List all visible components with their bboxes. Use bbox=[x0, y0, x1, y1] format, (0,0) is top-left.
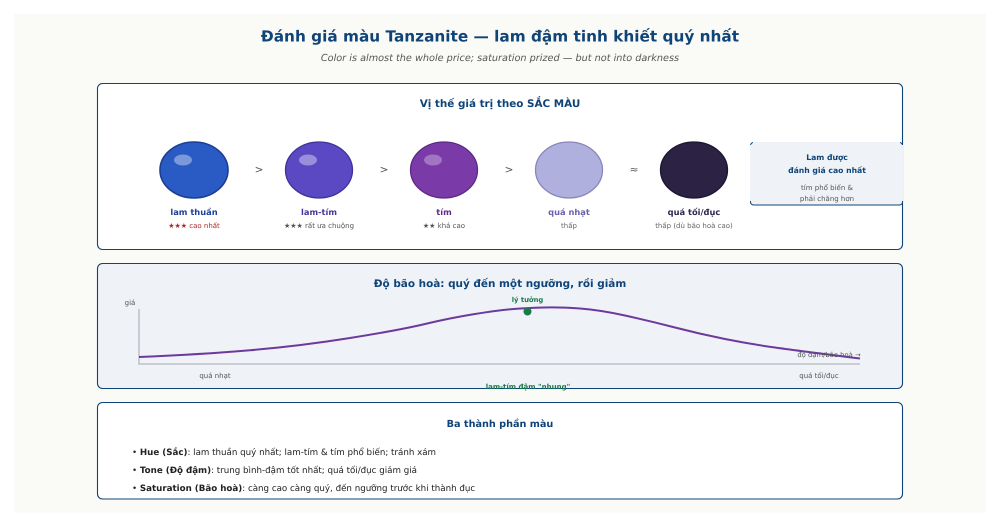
gem: too pale: quá nhạt bbox=[548, 207, 590, 217]
gem: too dark: thấp (dù bão hoà cao) bbox=[655, 222, 733, 230]
line chart: price vs saturation: độ đậm/bão hoà → bbox=[797, 351, 861, 359]
gem: violet bbox=[410, 142, 478, 230]
title: Đánh giá màu Tanzanite — lam đậm tinh khiết quý nhất bbox=[261, 28, 739, 46]
line chart: price vs saturation: giá bbox=[125, 299, 135, 307]
comparison symbol: > bbox=[505, 164, 513, 176]
line chart: price vs saturation: quá nhạt bbox=[199, 372, 231, 380]
gem: pure blue: lam thuần bbox=[170, 207, 218, 217]
gem: violet: ★★ khá cao bbox=[423, 222, 465, 230]
panel: hue value ranking bbox=[98, 84, 903, 250]
panel: saturation curve bbox=[98, 264, 902, 391]
panel heading: saturation: Độ bão hoà: quý đến một ngưỡng, rồi giảm bbox=[374, 277, 626, 290]
subtitle: Color is almost the whole price; saturation prized — but not into darkness bbox=[321, 53, 679, 64]
comparison symbol: > bbox=[380, 164, 388, 176]
panel heading: components: Ba thành phần màu bbox=[447, 418, 553, 430]
gem: pure blue bbox=[160, 142, 228, 230]
line chart: price vs saturation bbox=[125, 296, 861, 391]
gem: too pale bbox=[536, 142, 602, 230]
panel heading: hue ranking: Vị thế giá trị theo SẮC MÀU bbox=[420, 96, 580, 110]
gem: blue-violet: ★★★ rất ưa chuộng bbox=[284, 222, 354, 230]
gem: too dark bbox=[655, 142, 733, 230]
comparison symbol: ≈ bbox=[630, 164, 638, 176]
callout: blue rated highest: phải chăng hơn bbox=[800, 195, 854, 203]
line chart: price vs saturation: lý tưởng bbox=[512, 296, 543, 304]
gem: pure blue: ★★★ cao nhất bbox=[168, 222, 220, 230]
callout: blue rated highest: Lam được bbox=[806, 153, 848, 162]
gem: blue-violet bbox=[284, 142, 354, 230]
bullet: tone: • Tone (Độ đậm): trung bình-đậm tốt nhất; quá tối/đục giảm giá bbox=[132, 465, 417, 476]
gem: blue-violet: lam-tím bbox=[301, 207, 337, 217]
gem: violet: tím bbox=[436, 207, 452, 217]
gem: too pale: thấp bbox=[561, 222, 578, 230]
line chart: price vs saturation: lam-tím đậm "nhung" bbox=[486, 383, 570, 391]
bullet: saturation: • Saturation (Bão hoà): càng cao càng quý, đến ngưỡng trước khi thành đục bbox=[132, 483, 475, 494]
bullet: hue: • Hue (Sắc): lam thuần quý nhất; lam-tím & tím phổ biến; tránh xám bbox=[132, 447, 436, 458]
callout: blue rated highest: tím phổ biến & bbox=[801, 183, 854, 192]
callout: blue rated highest: đánh giá cao nhất bbox=[788, 166, 866, 175]
line chart: price vs saturation: quá tối/đục bbox=[799, 372, 839, 380]
comparison symbol: > bbox=[255, 164, 263, 176]
panel: three colour components bbox=[98, 402, 902, 499]
gem: too dark: quá tối/đục bbox=[668, 207, 720, 217]
callout: blue rated highest bbox=[750, 142, 903, 205]
